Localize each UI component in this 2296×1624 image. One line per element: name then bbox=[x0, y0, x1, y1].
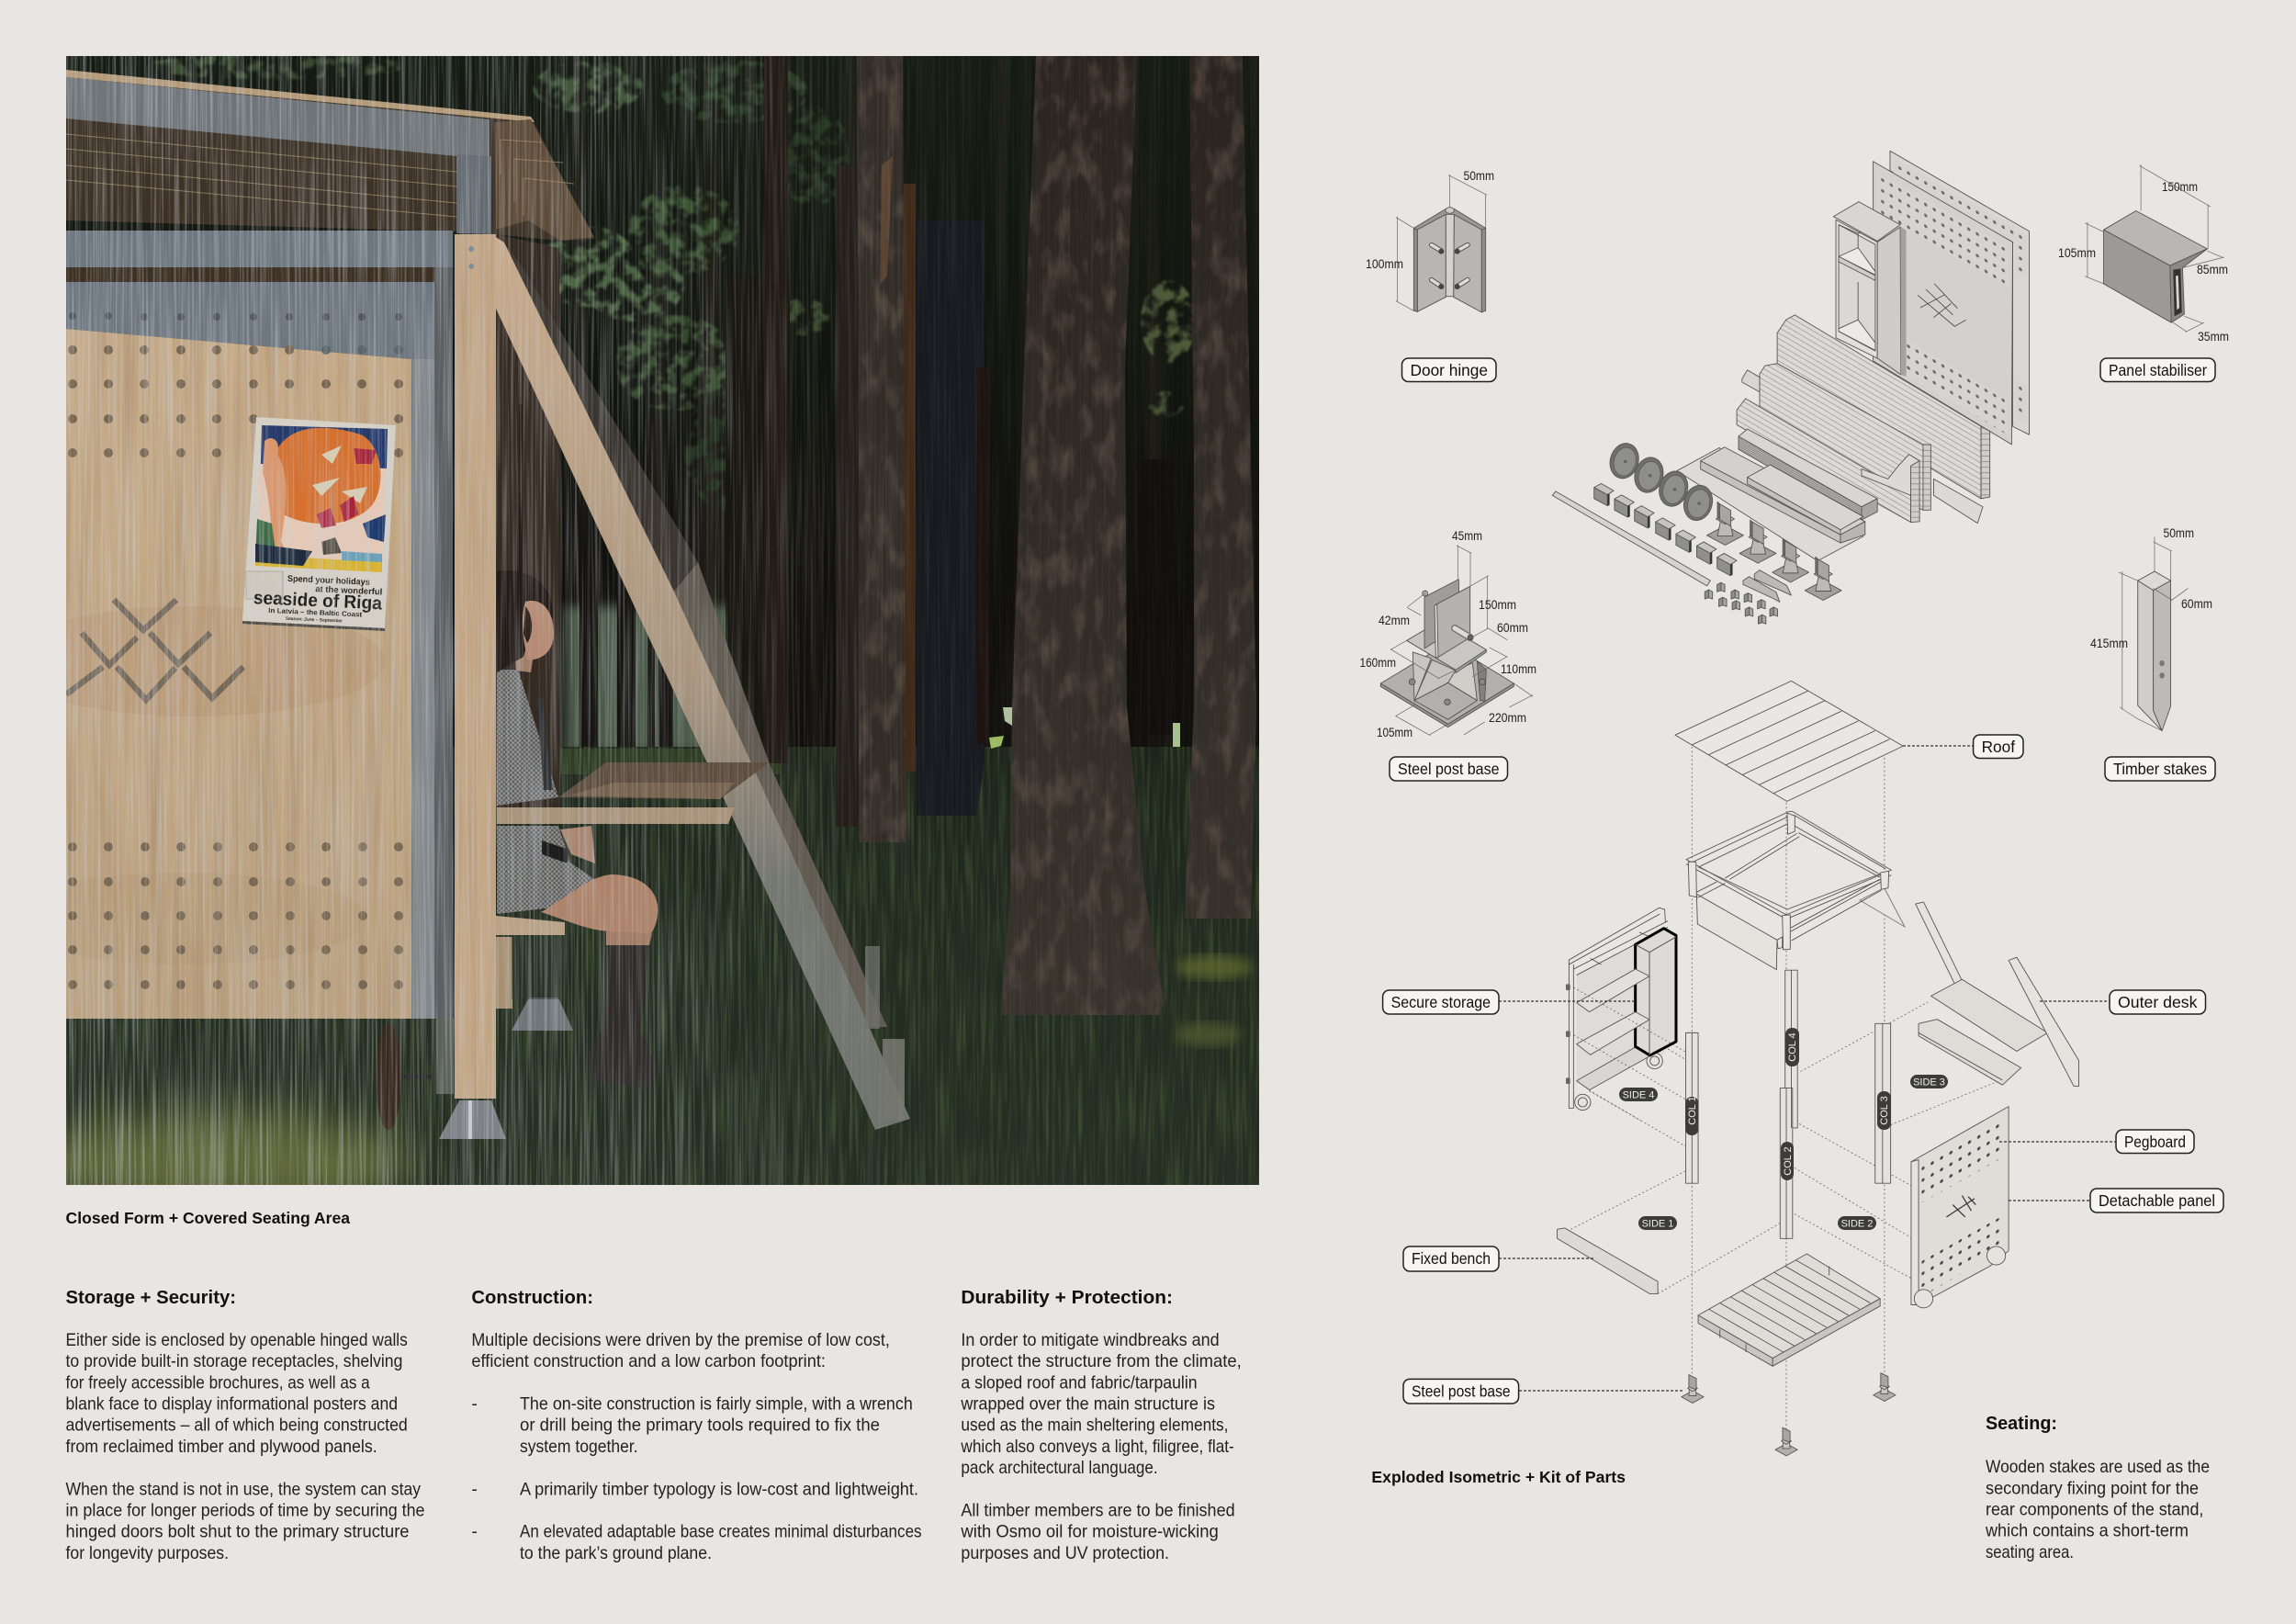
text column: seating: Seating: bbox=[1986, 1413, 2057, 1434]
kit of parts stack drawing bbox=[1552, 151, 2030, 624]
label: steel post base, exploded view: Steel post base bbox=[1412, 1382, 1511, 1400]
poster: seaside of Riga: seaside of Riga bbox=[253, 588, 383, 614]
dimension labels: 45mm bbox=[1452, 528, 1482, 543]
timber plank stacks bbox=[1737, 315, 1990, 524]
outer desk and sticks bbox=[1916, 902, 2078, 1087]
rain overlay bbox=[66, 56, 1259, 1185]
text column: storage and security: advertisements – all of which being constructed bbox=[66, 1415, 408, 1435]
text column: durability and protection: which also conveys a light, filigree, flat- bbox=[961, 1437, 1234, 1457]
text column: seating: seating area. bbox=[1986, 1542, 2074, 1562]
text column: storage and security: from reclaimed timber and plywood panels. bbox=[66, 1437, 377, 1457]
text column: durability and protection: All timber members are to be finished bbox=[961, 1501, 1235, 1521]
text column: seating bbox=[1985, 1413, 2210, 1562]
text column: durability and protection bbox=[960, 1287, 1242, 1563]
column and side tags: COL 1 bbox=[1687, 1096, 1698, 1125]
text column: durability and protection: pack architectural language. bbox=[961, 1458, 1158, 1478]
flat boards bbox=[1677, 429, 1877, 561]
text column: seating: Wooden stakes are used as the bbox=[1986, 1457, 2210, 1477]
poster: seaside of Riga: Spend your holidays bbox=[287, 574, 370, 588]
floor deck bbox=[1698, 1254, 1880, 1366]
column and side tags: SIDE 2 bbox=[1841, 1218, 1873, 1229]
timber rod bbox=[1552, 491, 1710, 586]
door hinge drawing bbox=[1396, 175, 1487, 312]
columns bbox=[1686, 970, 1891, 1238]
steel post base drawing bbox=[1380, 545, 1533, 736]
text column: durability and protection: Durability + Protection: bbox=[961, 1287, 1173, 1308]
roof bbox=[66, 70, 594, 241]
dimension labels: 150mm bbox=[2162, 179, 2198, 194]
panel stabiliser brackets bbox=[1594, 483, 1737, 576]
post bases bbox=[1707, 502, 1841, 601]
dimension labels: 85mm bbox=[2197, 262, 2228, 276]
rear wooden post bbox=[496, 234, 559, 808]
text column: construction: - bbox=[471, 1394, 478, 1415]
label: door hinge bbox=[1401, 358, 1496, 382]
small post bases bbox=[1682, 1373, 1896, 1456]
text column: storage and security: hinged doors bolt shut to the primary structure bbox=[66, 1521, 410, 1541]
seated figure bbox=[497, 570, 658, 1088]
stakes bbox=[1743, 570, 1791, 602]
label: timber stakes: Timber stakes bbox=[2113, 760, 2207, 778]
background tree trunks bbox=[764, 56, 1256, 1015]
text column: construction: The on-site construction is fairly simple, with a wrench bbox=[520, 1394, 913, 1415]
label: roof bbox=[1974, 735, 2023, 759]
text column: construction: Multiple decisions were driven by the premise of low cost, bbox=[471, 1330, 890, 1350]
distant clearing bbox=[565, 606, 748, 753]
label: fixed bench: Fixed bench bbox=[1412, 1249, 1491, 1268]
panel stabiliser, timber stake details bbox=[2085, 164, 2224, 731]
timber brace and fabric screen bbox=[491, 234, 910, 1130]
four wheels bbox=[1606, 441, 1716, 523]
dimension labels: 50mm bbox=[2164, 525, 2194, 540]
panel: forest render with closed stand and seated figure bbox=[0, 53, 1259, 1212]
front pegboard bbox=[1874, 162, 2013, 445]
cut-out woven motif bbox=[66, 600, 243, 700]
pegboard holes bbox=[68, 312, 403, 989]
fixed bench and bench support bbox=[492, 916, 573, 1031]
text column: construction: system together. bbox=[520, 1437, 638, 1457]
leader lines bbox=[1499, 746, 2116, 1391]
text column: construction: A primarily timber typology is low-cost and lightweight. bbox=[520, 1479, 918, 1499]
text column: durability and protection: protect the structure from the climate, bbox=[961, 1351, 1242, 1371]
label: secure storage: Secure storage bbox=[1391, 993, 1491, 1011]
text column: seating: rear components of the stand, bbox=[1986, 1499, 2203, 1519]
ground bbox=[66, 747, 1259, 1185]
text column: durability and protection: a sloped roof and fabric/tarpaulin bbox=[961, 1372, 1198, 1393]
column and side tags: COL 2 bbox=[1783, 1146, 1794, 1176]
dimension labels: 35mm bbox=[2198, 329, 2229, 344]
text column: storage and security: for freely accessible brochures, as well as a bbox=[66, 1372, 370, 1393]
text column: seating: secondary fixing point for the bbox=[1986, 1479, 2199, 1499]
roof bbox=[1675, 681, 1903, 801]
text column: seating: which contains a short-term bbox=[1985, 1521, 2189, 1541]
text column: construction: - bbox=[471, 1479, 478, 1499]
forest foliage bbox=[147, 53, 1196, 514]
poster: seaside of Riga bbox=[242, 417, 396, 631]
panel stabiliser drawing bbox=[2085, 164, 2224, 332]
text column: construction: - bbox=[471, 1521, 478, 1541]
bark texture bbox=[845, 56, 1259, 1030]
bright gaps between trunks bbox=[989, 707, 1180, 749]
shelves bbox=[1577, 969, 1649, 1054]
column and side tags: SIDE 1 bbox=[1642, 1218, 1673, 1229]
dimension labels: 60mm bbox=[1497, 620, 1528, 635]
column and side tags: COL 3 bbox=[1879, 1096, 1890, 1125]
wheel bbox=[376, 1023, 432, 1130]
poster: seaside of Riga: at the wonderful bbox=[315, 584, 383, 597]
fixed bench bbox=[1558, 1228, 1658, 1293]
label: steel post base, exploded view bbox=[1403, 1379, 1519, 1404]
text column: storage and security: blank face to display informational posters and bbox=[66, 1394, 398, 1415]
vertical and connecting guide lines bbox=[1570, 739, 2011, 1441]
text column: storage and security: in place for longer periods of time by securing the bbox=[66, 1501, 424, 1521]
dimension labels: 42mm bbox=[1379, 613, 1410, 627]
column and side tags: SIDE 4 bbox=[1623, 1089, 1654, 1100]
text column: construction: or drill being the primary tools required to fix the bbox=[520, 1415, 880, 1435]
text column: construction: efficient construction and a low carbon footprint: bbox=[471, 1351, 826, 1371]
text column: durability and protection: with Osmo oil for moisture-wicking bbox=[960, 1521, 1219, 1541]
label: fixed bench bbox=[1403, 1246, 1499, 1271]
label: roof: Roof bbox=[1982, 738, 2015, 756]
column and side tags bbox=[1619, 1028, 1948, 1230]
dimension labels: 415mm bbox=[2090, 636, 2128, 650]
text column: durability and protection: In order to mitigate windbreaks and bbox=[961, 1330, 1220, 1350]
primary frame bbox=[1686, 811, 1905, 970]
timber stake drawing bbox=[2119, 536, 2188, 731]
label: outer desk bbox=[2110, 990, 2206, 1014]
secure storage box highlighted bbox=[1636, 929, 1676, 1055]
text column: storage and security: When the stand is not in use, the system can stay bbox=[66, 1479, 421, 1499]
label: door hinge: Door hinge bbox=[1411, 361, 1488, 379]
text column: durability and protection: used as the main sheltering elements, bbox=[961, 1415, 1229, 1435]
lit grass patches bbox=[28, 955, 1253, 1212]
poster: seaside of Riga: In Latvia – the Baltic Coast bbox=[268, 606, 363, 618]
text column: storage and security: Either side is enclosed by openable hinged walls bbox=[66, 1330, 408, 1350]
text column: storage and security: to provide built-in storage receptacles, shelving bbox=[66, 1351, 402, 1371]
label: outer desk: Outer desk bbox=[2118, 993, 2198, 1011]
primary timber post bbox=[439, 234, 506, 1139]
storage cabinet bbox=[1833, 202, 1907, 377]
dimension labels: 105mm bbox=[2058, 245, 2096, 260]
dimension labels: 50mm bbox=[1464, 168, 1494, 183]
door hinges bbox=[1705, 582, 1777, 624]
text column: construction bbox=[471, 1287, 922, 1563]
text column: durability and protection: purposes and UV protection. bbox=[961, 1543, 1169, 1563]
side 4 storage unit bbox=[1566, 908, 1685, 1121]
detachable pegboard panel bbox=[1911, 1107, 2009, 1308]
text column: storage and security: Storage + Security: bbox=[66, 1287, 236, 1308]
column and side tags: SIDE 3 bbox=[1913, 1077, 1945, 1088]
label: detachable panel: Detachable panel bbox=[2099, 1191, 2215, 1210]
text column: storage and security bbox=[66, 1287, 424, 1563]
dimension labels bbox=[1359, 168, 2229, 739]
back pegboard bbox=[1890, 151, 2030, 434]
text column: construction: An elevated adaptable base creates minimal disturbances bbox=[520, 1521, 922, 1541]
dimension labels: 110mm bbox=[1501, 661, 1536, 676]
poster: seaside of Riga: Season: June – September bbox=[286, 616, 343, 625]
outer desk bbox=[497, 762, 770, 824]
label: panel stabiliser: Panel stabiliser bbox=[2109, 361, 2207, 379]
text column: construction: Construction: bbox=[471, 1287, 593, 1308]
caption: exploded isometric: Exploded Isometric + Kit of Parts bbox=[1371, 1468, 1626, 1486]
dimension labels: 160mm bbox=[1359, 655, 1396, 670]
dimension labels: 60mm bbox=[2181, 596, 2212, 611]
label: pegboard: Pegboard bbox=[2124, 1133, 2186, 1151]
column and side tags: COL 4 bbox=[1787, 1032, 1798, 1062]
dimension labels: 150mm bbox=[1479, 597, 1516, 612]
dimension labels: 100mm bbox=[1366, 256, 1403, 271]
exploded isometric drawing bbox=[1558, 681, 2078, 1456]
text column: construction: to the park’s ground plane. bbox=[520, 1543, 712, 1563]
dimension labels: 220mm bbox=[1489, 710, 1526, 725]
label: steel post base: Steel post base bbox=[1398, 760, 1499, 778]
text column: durability and protection: wrapped over the main structure is bbox=[960, 1394, 1215, 1415]
text column: storage and security: for longevity purposes. bbox=[66, 1543, 229, 1563]
closed wall: grey side and plywood bbox=[0, 231, 454, 1094]
caption: closed form: Closed Form + Covered Seating Area bbox=[66, 1209, 350, 1227]
dimension labels: 105mm bbox=[1377, 725, 1412, 739]
